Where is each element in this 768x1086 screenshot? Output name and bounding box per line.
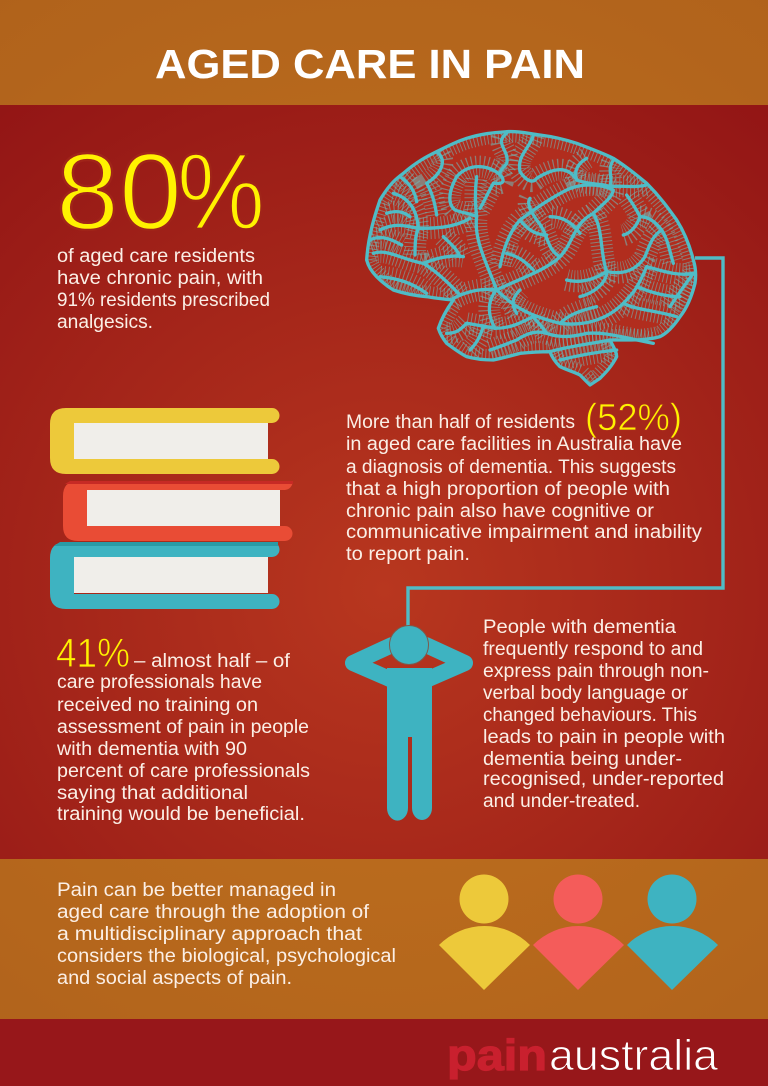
text block: multidisciplinary: a multidisciplinary approach that [57, 923, 363, 945]
text block: dementia diagnosis: More than half of residents [346, 411, 575, 433]
icon: person holding head [353, 626, 465, 821]
yellow book [50, 408, 280, 474]
stat: 80%: 80 [56, 131, 182, 253]
logo: painaustralia: australia [549, 1031, 719, 1080]
footer band [0, 1019, 768, 1086]
text block: body language: dementia being under- [483, 748, 682, 770]
text block: training: – almost half – of [134, 650, 291, 672]
icon: three people [439, 874, 718, 990]
stat: 80% [56, 131, 265, 253]
text block: multidisciplinary: Pain can be better managed in [57, 879, 336, 901]
stat: 52%: (52%) [585, 397, 682, 439]
teal book [50, 542, 280, 609]
text block: body language: recognised, under-reported [483, 768, 724, 790]
logo: painaustralia [447, 1031, 719, 1080]
text block: dementia diagnosis: that a high proportion of people with [346, 478, 670, 500]
text block: chronic pain: 91% residents prescribed [57, 289, 270, 311]
stat: 80%: % [177, 131, 265, 253]
text block: dementia diagnosis: a diagnosis of dementia. This suggests [346, 456, 676, 478]
text block: body language: verbal body language or [483, 682, 688, 704]
text block: training: training would be beneficial. [57, 803, 305, 825]
text block: training: received no training on [57, 694, 258, 716]
text block: training: percent of care professionals [57, 760, 310, 782]
text block: multidisciplinary [57, 879, 396, 989]
stat: 41%: 41% [56, 630, 130, 676]
text block: multidisciplinary: and social aspects of pain. [57, 967, 292, 989]
icon: brain [365, 130, 698, 387]
text block: body language [483, 616, 725, 812]
text block: dementia diagnosis [346, 397, 702, 565]
logo: painaustralia: pain [447, 1031, 547, 1080]
teal person [627, 874, 718, 990]
red person [533, 874, 624, 990]
text block: training: with dementia with 90 [56, 738, 247, 760]
text block: training: saying that additional [57, 782, 248, 804]
yellow person [439, 874, 530, 990]
text block: body language: express pain through non- [483, 660, 709, 682]
header band [0, 0, 768, 105]
text block: body language: and under-treated. [483, 790, 640, 812]
text block: training [56, 650, 310, 825]
text block: chronic pain: have chronic pain, with [57, 267, 263, 289]
text block: chronic pain: of aged care residents [57, 245, 255, 267]
text block: training: care professionals have [57, 671, 262, 693]
text block: chronic pain [57, 245, 270, 333]
title: AGED CARE IN PAIN [155, 41, 585, 87]
text block: dementia diagnosis: in aged care facilities in Australia have [346, 433, 682, 455]
red book [63, 481, 293, 541]
connector line [408, 258, 723, 628]
text block: body language: changed behaviours. This [483, 704, 697, 726]
text block: dementia diagnosis: to report pain. [346, 543, 470, 565]
icon: stack of books [50, 408, 293, 609]
text block: body language: leads to pain in people with [483, 726, 725, 748]
text block: dementia diagnosis: communicative impairment and inability [346, 521, 702, 543]
text block: dementia diagnosis: chronic pain also have cognitive or [346, 500, 654, 522]
text block: multidisciplinary: aged care through the adoption of [57, 901, 370, 923]
bottom band [0, 859, 768, 1019]
text block: body language: People with dementia [483, 616, 676, 638]
text block: training: assessment of pain in people [57, 716, 309, 738]
text block: body language: frequently respond to and [483, 638, 703, 660]
text block: multidisciplinary: considers the biological, psychological [57, 945, 396, 967]
text block: chronic pain: analgesics. [57, 311, 153, 333]
